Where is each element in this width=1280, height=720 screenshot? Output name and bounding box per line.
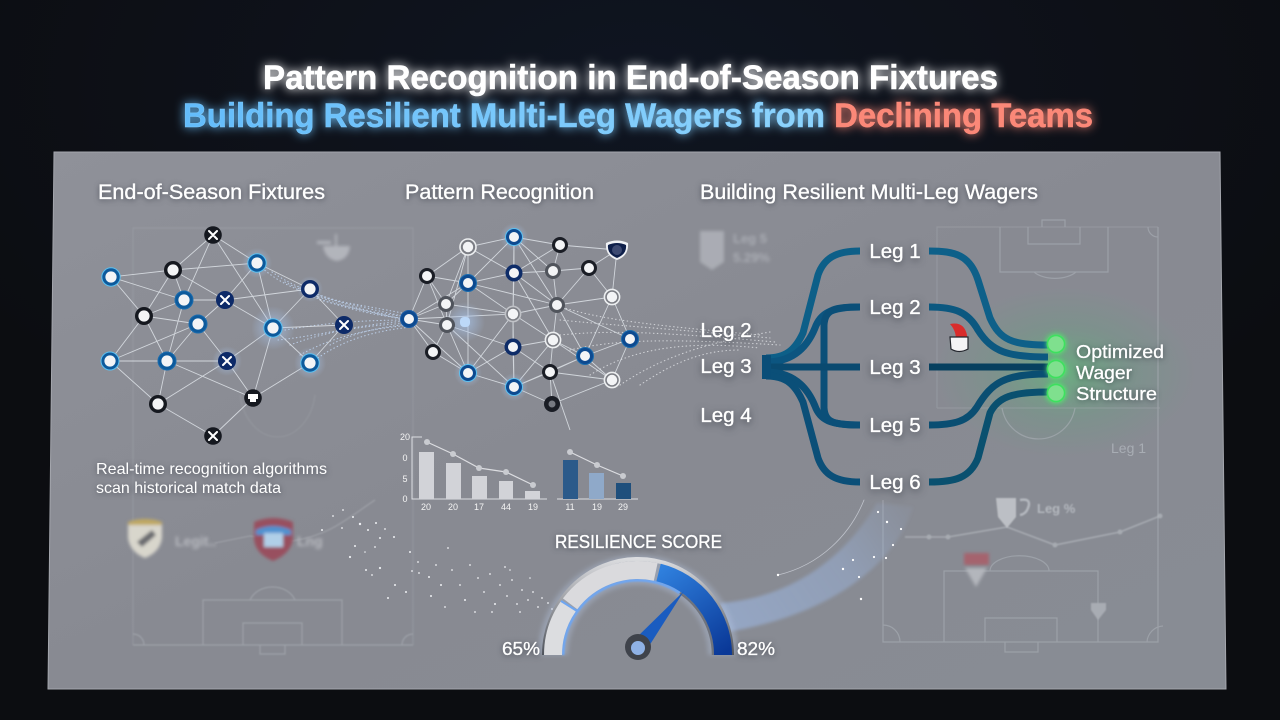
wager flow diagram (700, 240, 1164, 494)
ghost shield with leg stat: 5.29% (733, 250, 770, 265)
section heading: pattern recognition: Pattern Recognition (405, 181, 594, 204)
ghost label: Lng (297, 533, 323, 549)
gauge glow (553, 570, 723, 655)
trend line (427, 442, 533, 485)
segment divider (561, 601, 577, 611)
output label: Structure (1076, 383, 1157, 404)
node centres (104, 257, 316, 410)
node centres (404, 232, 635, 408)
x axis labels (565, 502, 628, 512)
trend line (570, 452, 623, 476)
ghost badges and labels (128, 231, 1162, 620)
resilience score gauge (502, 531, 775, 660)
network one: fixtures (101, 226, 353, 445)
ghost icon top left (317, 234, 350, 261)
y axis ticks: 0 (402, 453, 408, 463)
inner rim (680, 593, 713, 655)
inner blue glow (563, 580, 680, 655)
high value: 82% (737, 638, 775, 659)
glow behind nodes (445, 223, 528, 401)
ghost shield with leg percent: Leg % (1037, 501, 1076, 516)
x axis labels (421, 502, 538, 512)
x axis labels: 19 (592, 502, 602, 512)
nodes: navy (216, 280, 353, 370)
ghost shield with leg percent (996, 498, 1076, 528)
green glow dots halo (1045, 333, 1067, 404)
x axis labels: 17 (474, 502, 484, 512)
leg labels: Leg 5 (869, 414, 921, 437)
gauge heading: RESILIENCE SCORE (555, 531, 722, 552)
nodes: navy (504, 264, 522, 356)
stream: network two to legs (555, 305, 780, 385)
active light node (460, 317, 470, 327)
source leg labels (700, 319, 752, 427)
y axis ticks: 5 (402, 474, 408, 484)
y axis ticks (400, 432, 410, 504)
segment: light low (553, 606, 568, 655)
needle hub (625, 634, 651, 660)
bars (419, 452, 540, 499)
badge: right club (254, 518, 293, 561)
nodes: dark (419, 237, 597, 412)
title line 1: Pattern Recognition in End-of-Season Fixtures (263, 59, 998, 97)
shield node (606, 240, 628, 260)
node crest mark (248, 394, 258, 402)
bar chart: declining values (400, 432, 547, 512)
band sparkles (777, 511, 902, 600)
title (183, 59, 1093, 135)
axes (412, 437, 547, 499)
leg labels (869, 240, 921, 494)
ghost small shield (1091, 603, 1106, 620)
x axis labels: 11 (565, 502, 575, 512)
trend dots (567, 449, 626, 479)
y axis ticks: 20 (400, 432, 410, 442)
section heading: fixtures: End-of-Season Fixtures (98, 181, 325, 204)
ghost label leg 1: Leg 1 (1111, 440, 1146, 456)
x axis labels: 20 (448, 502, 458, 512)
section heading: wagers: Building Resilient Multi-Leg Wagers (700, 181, 1038, 204)
source leg labels: Leg 4 (700, 404, 752, 427)
particle streams (262, 268, 864, 575)
stream: gauge sweep line (778, 500, 864, 575)
output label: Wager (1076, 362, 1132, 383)
nodes: white ring (460, 239, 620, 388)
x axis labels: 29 (618, 502, 628, 512)
x axis labels: 44 (501, 502, 511, 512)
caption: recognition algorithms: scan historical match data (96, 480, 281, 497)
caption: recognition algorithms (96, 461, 327, 497)
nodes: blue (400, 228, 638, 396)
network two: pattern recognition (400, 223, 638, 430)
green output nodes (1047, 335, 1065, 402)
ghost shield with leg stat (700, 231, 770, 270)
stream: network one to network two (262, 268, 412, 360)
green glow (935, 287, 1195, 457)
leg labels: Leg 1 (869, 240, 921, 263)
x axis labels: 19 (528, 502, 538, 512)
nodes: gray (438, 263, 565, 333)
ghost football pitches (133, 220, 1163, 654)
nodes: blue (101, 254, 319, 372)
particle scatter: lower left into gauge (321, 509, 553, 613)
leg labels: Leg 6 (869, 471, 921, 494)
badge: left club (128, 519, 162, 558)
source leg labels: Leg 2 (700, 319, 752, 342)
ghost trend line left (215, 500, 375, 543)
nodes: black (135, 226, 262, 445)
caption: recognition algorithms: Real-time recognition algorithms (96, 461, 327, 478)
bars (563, 460, 578, 499)
ghost red shield (964, 553, 989, 587)
output label (1076, 341, 1164, 404)
needle (631, 591, 684, 654)
glow band from gauge to flow chart (720, 503, 913, 632)
leg labels: Leg 2 (869, 296, 921, 319)
bar chart: blue comparison (557, 449, 638, 512)
outer rim (544, 559, 732, 655)
source block (762, 355, 771, 379)
node x marks (209, 231, 348, 440)
ghost trend line right (905, 514, 1162, 548)
axis (557, 498, 638, 500)
merging connectors (929, 251, 1048, 482)
segment: light mid (570, 570, 656, 604)
ghost label: Legit.. (175, 533, 216, 549)
output label: Optimized (1076, 341, 1164, 362)
title line 2: Building Resilient Multi-Leg Wagers from Declining Teams (183, 97, 1093, 135)
leg labels: Leg 3 (869, 356, 921, 379)
trend dots (424, 439, 536, 488)
glow behind active nodes (212, 248, 326, 379)
branching connectors (766, 251, 860, 482)
left pitch (133, 228, 413, 654)
main panel (48, 152, 1226, 689)
segment: blue high (659, 572, 723, 655)
x axis labels: 20 (421, 502, 431, 512)
y axis ticks: 0 (402, 494, 408, 504)
ghost shield with leg stat: Leg 5 (733, 231, 767, 246)
source leg labels: Leg 3 (700, 355, 752, 378)
low value: 65% (502, 638, 540, 659)
icon: red cap (950, 323, 968, 352)
right pitch (883, 220, 1163, 652)
